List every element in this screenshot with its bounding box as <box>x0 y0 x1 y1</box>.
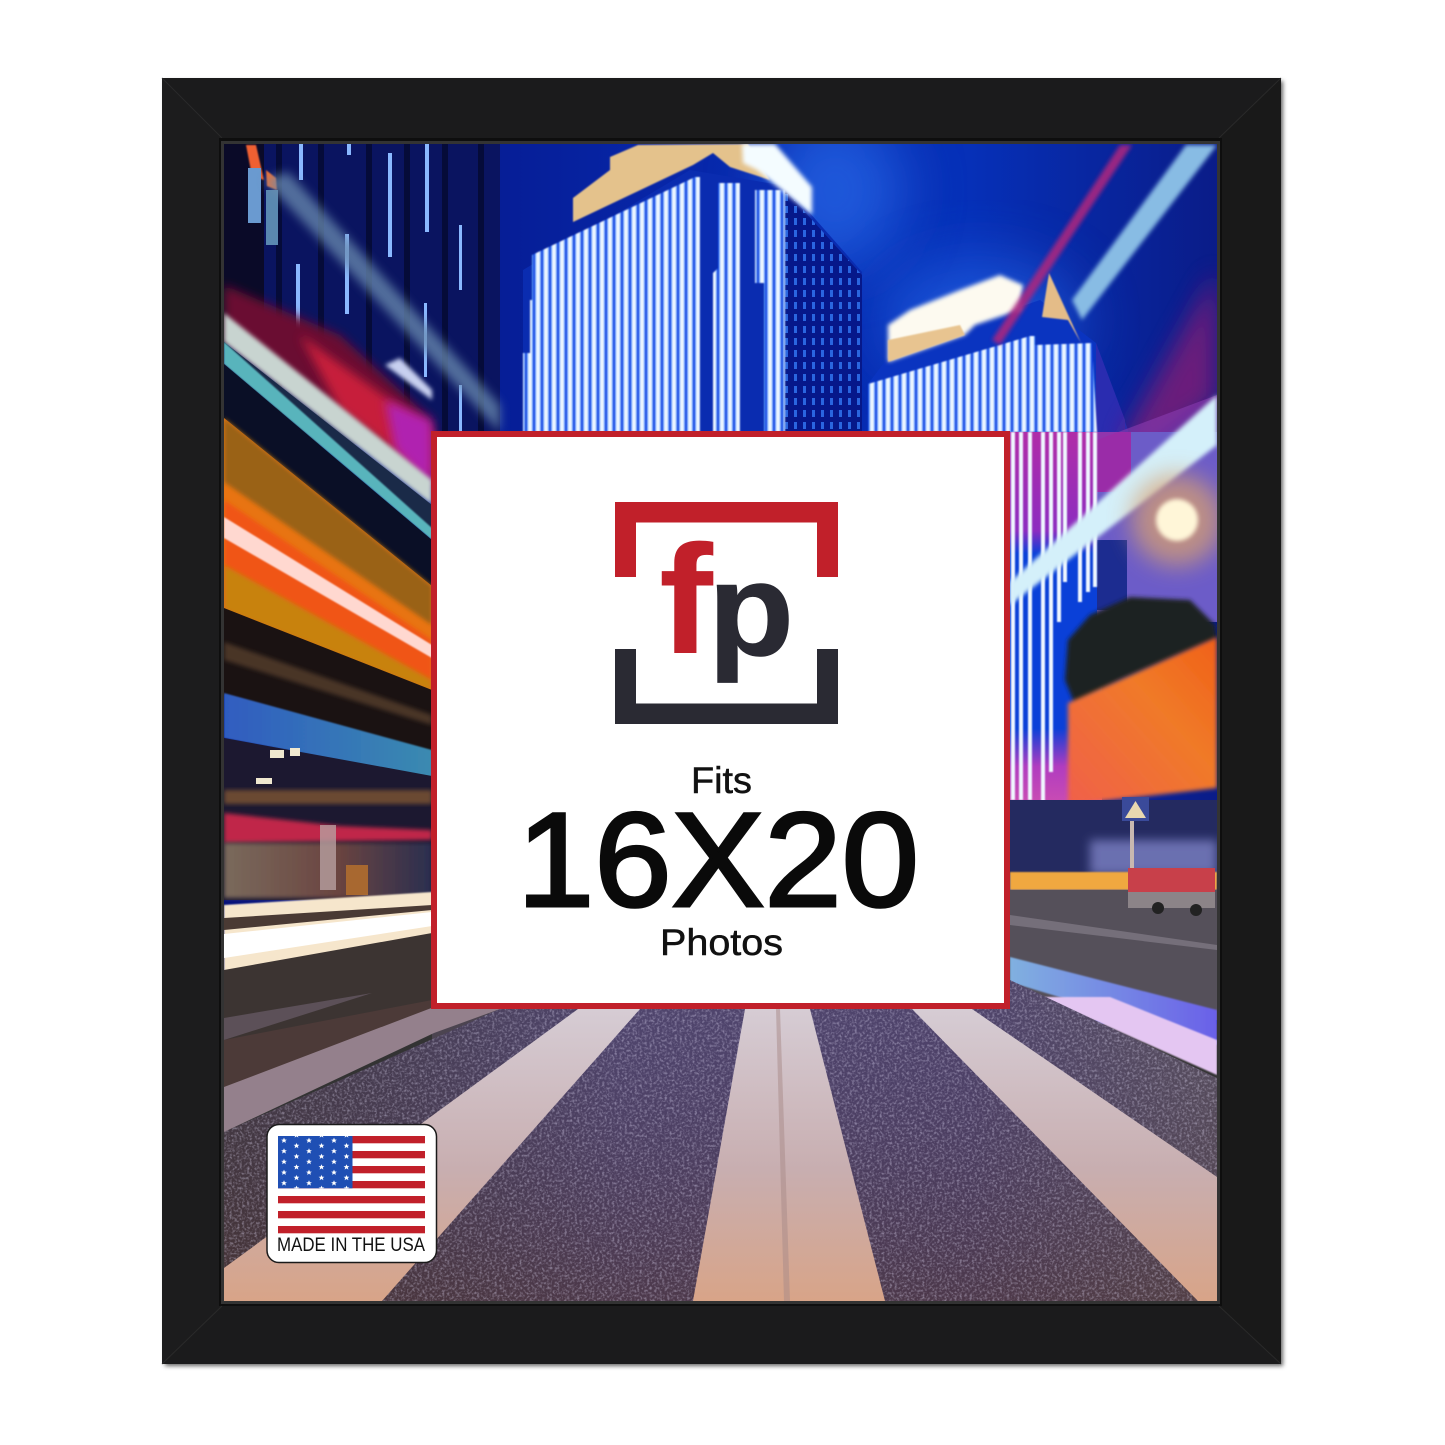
street lamp glow <box>1131 474 1223 566</box>
road base under asphalt <box>432 1009 500 1040</box>
left red and magenta haze <box>224 285 432 490</box>
picture frame <box>162 78 1283 1366</box>
right orange light trail <box>1068 637 1217 805</box>
left blue light trail <box>224 693 432 778</box>
right tower lower section <box>1010 395 1217 812</box>
sky <box>224 144 1217 1024</box>
left orange light trail <box>224 418 432 692</box>
right tower with lit roof <box>868 272 1128 432</box>
dark bracket <box>615 649 838 724</box>
pedestrian crossing sign <box>1122 797 1149 821</box>
right blue and lavender streaks <box>1010 957 1217 1075</box>
photos text: Photos <box>660 922 783 963</box>
road stripes <box>224 1007 1217 1301</box>
badge caption: MADE IN THE USA <box>277 1235 425 1256</box>
made in the USA badge <box>267 1124 436 1262</box>
right white-blue beam <box>1010 395 1217 605</box>
right street <box>1010 797 1217 1020</box>
left dark gap under trail <box>224 364 432 600</box>
left dark building with neon lines <box>224 144 500 444</box>
red bracket <box>615 502 838 577</box>
left street and lights <box>224 738 432 900</box>
asphalt <box>224 980 1217 1301</box>
left white-teal light trail <box>224 313 432 505</box>
central tower with golden top <box>523 144 862 432</box>
left white light trail <box>224 892 432 972</box>
right tree <box>1065 597 1217 705</box>
size text: 16X20 <box>517 786 919 935</box>
flag <box>278 1136 425 1233</box>
logo <box>615 502 838 724</box>
left road <box>224 933 432 1090</box>
car <box>1128 868 1215 916</box>
logo letter p: p <box>708 536 794 683</box>
left faint diagonal beam <box>264 172 500 432</box>
center white label with red border <box>434 434 1007 1006</box>
fits text: Fits <box>691 760 752 801</box>
photo: city night scene with light trails <box>224 110 1223 1301</box>
left dark band <box>224 608 432 755</box>
logo letter f: f <box>659 513 713 686</box>
upper right streaks <box>990 144 1217 432</box>
